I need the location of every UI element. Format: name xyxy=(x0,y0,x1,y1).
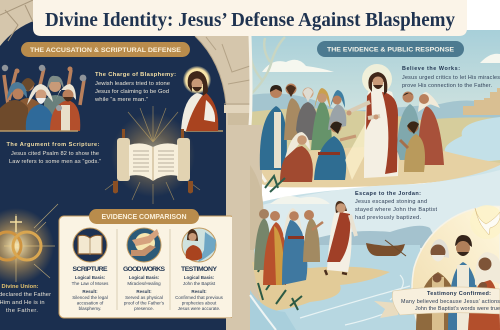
column: scripture: Logical Basis: xyxy=(75,275,106,280)
illustration: crowd listening xyxy=(260,84,356,182)
heading pill: accusation: THE ACCUSATION & SCRIPTURAL DEFENSE xyxy=(30,47,182,54)
tree branch xyxy=(250,37,285,95)
heading pill: accusation xyxy=(21,42,190,57)
text: escape to the Jordan: stayed where John the Baptist xyxy=(355,207,437,213)
column: scripture xyxy=(72,266,109,311)
text: divine union: Divine Union: xyxy=(2,284,39,290)
column: good works xyxy=(123,266,165,311)
column: scripture: SCRIPTURE xyxy=(72,266,108,273)
column: testimony: Result: xyxy=(191,289,207,294)
column: scripture: accusation of xyxy=(77,300,104,306)
column: good works: Miracles/Healing xyxy=(127,281,161,286)
ground xyxy=(250,108,500,180)
mountains xyxy=(310,226,440,248)
column: testimony: prophecies about xyxy=(182,300,217,306)
text: escape to the Jordan xyxy=(355,191,437,221)
column: good works: presence. xyxy=(134,306,154,311)
column: good works: Served as physical xyxy=(125,295,163,300)
illustration: followers at the river xyxy=(254,208,323,285)
panel: evidence comparison xyxy=(59,209,235,318)
text: argument from scripture: The Argument from Scripture: xyxy=(6,142,100,148)
water xyxy=(262,245,420,330)
column: good works: Logical Basis: xyxy=(129,275,160,280)
illustration: Jesus with halo xyxy=(181,66,218,131)
column: scripture: blasphemy. xyxy=(79,306,101,311)
icon: open book xyxy=(73,228,107,262)
column: good works: GOOD WORKS xyxy=(123,266,165,273)
column: testimony: John the Baptist xyxy=(183,281,216,286)
panel: evidence and public response scene xyxy=(250,30,500,187)
cloud right xyxy=(480,54,500,63)
text: charge of blasphemy: Jewish leaders tried to stone xyxy=(95,81,170,87)
icon: dove xyxy=(470,205,500,239)
column: testimony: Confirmed that previous xyxy=(175,295,224,300)
banner: testimony confirmed xyxy=(374,287,500,318)
banner: testimony confirmed: Testimony Confirmed: xyxy=(427,291,491,297)
small left waves xyxy=(250,295,276,330)
heading pill: evidence comparison xyxy=(89,209,199,224)
text: charge of blasphemy: while “a mere man.” xyxy=(94,97,148,103)
illustration: Jesus walking xyxy=(325,201,356,275)
illustration: Jesus healing with light xyxy=(345,64,398,180)
title card xyxy=(33,0,467,36)
white swoosh edge xyxy=(250,36,266,182)
stone arch top-left xyxy=(0,0,256,330)
text: divine union xyxy=(0,284,51,314)
text: escape to the Jordan: Escape to the Jordan: xyxy=(355,191,421,197)
column: testimony: Logical Basis: xyxy=(184,275,215,280)
column: scripture: Result: xyxy=(82,289,98,294)
cloud xyxy=(262,60,334,72)
left edge: stone above, water below xyxy=(250,165,264,250)
text: escape to the Jordan: had previously baptized. xyxy=(355,215,421,221)
column: testimony xyxy=(175,266,224,311)
illustration: kneeling followers on right xyxy=(397,92,444,172)
heading pill: evidence comparison: EVIDENCE COMPARISON xyxy=(102,214,186,221)
text: argument from scripture xyxy=(6,142,101,165)
text: divine union: declared the Father xyxy=(0,292,51,298)
icon: John the Baptist xyxy=(182,228,216,262)
column: testimony: Jesus were accurate. xyxy=(178,306,220,311)
text: believe the works: prove His connection to the Father. xyxy=(402,83,492,89)
city xyxy=(463,88,500,115)
stone column front edge xyxy=(226,125,262,330)
hills xyxy=(250,93,500,125)
text: charge of blasphemy xyxy=(94,72,176,103)
heading pill: evidence: THE EVIDENCE & PUBLIC RESPONSE xyxy=(327,46,455,54)
sand bank xyxy=(252,262,390,312)
column: scripture: The Law of Moses xyxy=(72,281,109,286)
banner: testimony confirmed: Many believed because Jesus’ actions xyxy=(401,299,500,305)
panel: escape to the Jordan scene xyxy=(250,165,500,330)
illustration: glowing scripture scroll xyxy=(105,106,200,204)
text: charge of blasphemy: Jesus for claiming to be God xyxy=(95,89,169,95)
icon: boat on the Jordan xyxy=(366,240,406,256)
column: good works: proof of the Father’s xyxy=(124,300,165,306)
heading pill: evidence xyxy=(317,41,464,57)
lower-left water xyxy=(250,290,296,330)
text: believe the works: Jesus urged critics to let His miracles xyxy=(402,75,500,81)
illustration: small cloud xyxy=(270,196,330,204)
icon: healing hands xyxy=(127,228,161,262)
panel: stone background xyxy=(0,0,260,330)
figures: believers xyxy=(416,235,500,330)
column: scripture: Silenced the legal xyxy=(72,295,108,300)
panel: accusation navy arch xyxy=(0,20,226,330)
text: argument from scripture: Law refers to some men as “gods.” xyxy=(9,159,101,165)
column: testimony: TESTIMONY xyxy=(181,266,217,273)
text: argument from scripture: Jesus cited Psalm 82 to show the xyxy=(11,151,99,157)
river band xyxy=(250,165,500,330)
river xyxy=(445,117,500,161)
panel: testimony confirmed scene xyxy=(412,205,500,330)
title: Divine Identity: Jesus’ Defense Against Blasphemy xyxy=(45,9,455,31)
ledge xyxy=(0,130,223,132)
text: charge of blasphemy: The Charge of Blasphemy: xyxy=(95,72,176,78)
text: escape to the Jordan: Jesus escaped stoning and xyxy=(355,199,427,205)
wave lines xyxy=(300,275,425,325)
text: believe the works: Believe the Works: xyxy=(402,66,460,72)
text: believe the works xyxy=(402,66,500,89)
banner: testimony confirmed: John the Baptist’s words were true xyxy=(415,306,500,312)
icon: divine union rings xyxy=(0,204,58,284)
column: good works: Result: xyxy=(136,289,152,294)
sand xyxy=(250,147,500,187)
sky xyxy=(262,170,500,272)
illustration: angry crowd with stones xyxy=(0,65,86,131)
grass clumps xyxy=(258,250,302,310)
text: divine union: the Father. xyxy=(6,308,38,314)
text: divine union: Him and He is in xyxy=(0,300,44,306)
